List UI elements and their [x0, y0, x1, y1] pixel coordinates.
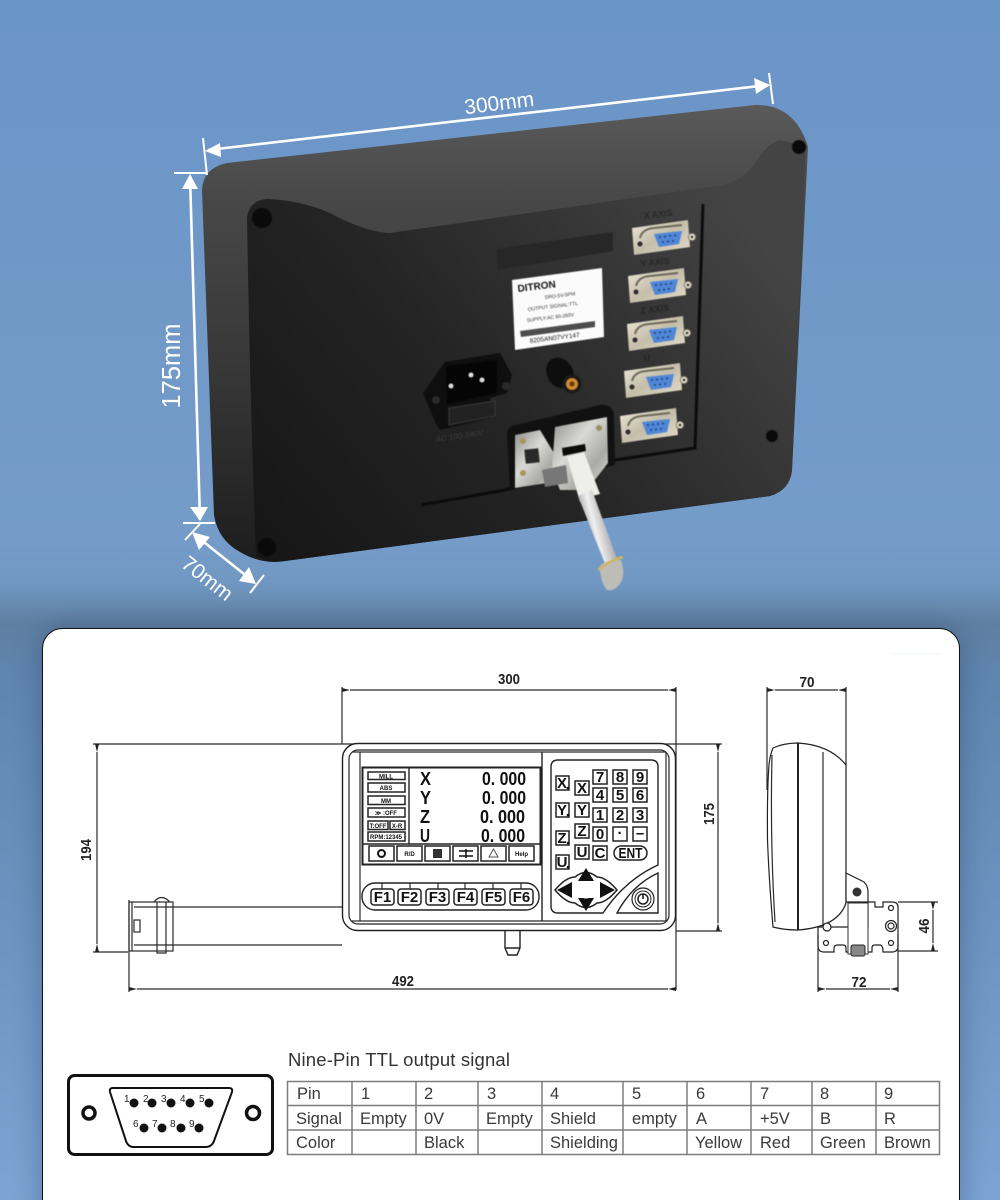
number keys: 1: [596, 807, 604, 824]
signal table: Green: [820, 1134, 866, 1152]
product label: 8205AN07VY147: [529, 332, 580, 345]
axis readouts: 0. 000: [482, 769, 526, 789]
axis keys: Z: [577, 823, 587, 840]
product label: DRO-5V-5PM: [545, 291, 576, 301]
number keys: –: [636, 825, 644, 842]
connector: Z axis: [627, 316, 691, 351]
dimension 46: [916, 910, 933, 943]
status boxes: ABS: [380, 786, 392, 792]
axis keys: U: [577, 844, 587, 861]
signal table: 8: [820, 1085, 829, 1103]
signal table: Empty: [360, 1110, 408, 1128]
number keys: 4: [596, 787, 605, 804]
pin numbers: 6: [133, 1119, 139, 1130]
dimension 175: 175: [701, 803, 718, 825]
number keys: ·: [618, 825, 622, 842]
panel shadow: [42, 628, 960, 1200]
signal table: B: [820, 1110, 831, 1128]
screw holes: [252, 140, 806, 556]
dimension 70: [775, 674, 838, 691]
status boxes: T:OFF: [370, 824, 387, 830]
signal table: 6: [696, 1085, 705, 1103]
axis zero keys: U: [557, 854, 567, 871]
BNC socket: [541, 353, 582, 394]
power socket: AC 100-240V: [434, 428, 484, 444]
axis readouts: 0. 000: [482, 788, 526, 808]
status boxes: RPM:12345: [370, 835, 403, 841]
power key: [617, 873, 658, 913]
probe plug and rod: [515, 417, 623, 590]
status boxes: [368, 772, 405, 841]
dimension 70: 70: [800, 674, 814, 691]
number keys: [593, 769, 647, 862]
axis labels: X AXIS: [643, 208, 673, 221]
signal table: Shielding: [550, 1134, 618, 1152]
product label: SUPPLY:AC 80-260V: [527, 312, 575, 324]
status boxes: MILL: [379, 774, 393, 780]
signal table: 2: [424, 1085, 433, 1103]
connector: probe: [620, 408, 684, 443]
axis labels: [640, 208, 673, 363]
signal table: Yellow: [695, 1134, 742, 1152]
mounting plate: [818, 902, 898, 952]
axis readouts: [420, 769, 526, 846]
axis readouts: Y: [420, 788, 431, 808]
photo: device rear view: [202, 105, 808, 590]
dimension: 70mm: 70mm: [177, 552, 237, 606]
axis readouts: U: [420, 826, 430, 846]
inner rear surface: [247, 140, 806, 561]
axis readouts: Z: [420, 807, 430, 827]
dimension: 300mm: 300mm: [463, 88, 535, 119]
axis readouts: 0. 000: [480, 807, 525, 827]
signal table: Color: [296, 1134, 336, 1152]
status boxes: MM: [381, 799, 391, 805]
signal table: empty: [632, 1110, 678, 1128]
function keys: F4: [457, 889, 475, 906]
signal table: 0V: [424, 1110, 444, 1128]
axis keys: Y: [577, 802, 587, 819]
panel: technical drawing: [42, 628, 960, 1200]
hinge: [846, 873, 868, 902]
heading: nine-pin signal: Nine-Pin TTL output signal: [288, 1049, 510, 1070]
soft keys: [369, 846, 534, 861]
dimension 72: [826, 974, 890, 991]
number keys: 0: [596, 826, 604, 843]
number keys: 8: [616, 769, 624, 786]
axis zero keys: Y: [557, 802, 567, 819]
axis labels: Z AXIS: [640, 303, 670, 316]
product label: OUTPUT SIGNAL:TTL: [528, 301, 579, 313]
axis keys: X: [577, 780, 587, 797]
signal table: A: [696, 1110, 707, 1128]
number keys: 5: [616, 787, 624, 804]
keypad: [551, 760, 658, 913]
number keys: 7: [596, 769, 604, 786]
signal table: Red: [760, 1134, 790, 1152]
signal table: Pin: [297, 1085, 321, 1103]
pins: [130, 1098, 214, 1132]
signal table: Signal: [296, 1110, 342, 1128]
number keys: ENT: [618, 845, 642, 862]
axis readouts: 0. 000: [481, 826, 525, 846]
nine-pin connector diagram: [68, 1076, 272, 1154]
function keys: F3: [429, 889, 446, 906]
dimension: 175mm: [158, 173, 215, 523]
function keys: F6: [513, 889, 530, 906]
mounting screw: [505, 931, 520, 955]
side view: [767, 674, 938, 992]
device body: [202, 105, 808, 562]
signal table: 4: [550, 1085, 559, 1103]
signal table: +5V: [760, 1110, 790, 1128]
power socket: [423, 353, 512, 444]
connector: U axis: [624, 363, 688, 398]
axis zero keys: [556, 775, 569, 871]
dimension: 300mm: [203, 73, 773, 175]
signal table: [287, 1081, 940, 1155]
signal table: Shield: [550, 1110, 596, 1128]
pin numbers: 3: [161, 1094, 167, 1105]
pin numbers: 2: [143, 1094, 149, 1105]
function keys: F2: [401, 889, 418, 906]
device side body: [767, 743, 846, 930]
function keys: F5: [485, 889, 502, 906]
dimension 46: 46: [916, 918, 933, 934]
pin numbers: 4: [180, 1094, 186, 1105]
dimension: 175mm: 175mm: [158, 323, 186, 409]
axis zero keys: Z: [557, 830, 567, 847]
product label: [512, 268, 604, 350]
signal table: 5: [632, 1085, 641, 1103]
axis keys: [575, 780, 589, 861]
pin numbers: 8: [170, 1119, 176, 1130]
number keys: 9: [636, 769, 644, 786]
function keys: [362, 883, 539, 910]
number keys: 3: [636, 807, 644, 824]
axis labels: Y AXIS: [640, 256, 670, 269]
pin numbers: 9: [189, 1119, 195, 1130]
signal table: 1: [361, 1085, 370, 1103]
dimension 492: 492: [392, 973, 414, 990]
signal table: R: [884, 1110, 896, 1128]
pin numbers: [124, 1094, 205, 1130]
signal table: 9: [884, 1085, 893, 1103]
signal table: Black: [424, 1134, 465, 1152]
status boxes: X-R: [392, 824, 403, 830]
connector: X axis: [632, 220, 696, 255]
soft keys: R/D: [404, 852, 415, 858]
pin numbers: 1: [124, 1094, 130, 1105]
mounting bracket front view: [129, 898, 342, 953]
signal table: Brown: [884, 1134, 931, 1152]
soft keys: Help: [515, 852, 528, 858]
dimension 72: 72: [852, 974, 866, 991]
dimension 300: 300: [498, 671, 520, 688]
signal table: Empty: [486, 1110, 534, 1128]
number keys: 6: [636, 787, 644, 804]
plug recess: [507, 405, 615, 490]
dimension lines front view: [78, 671, 722, 992]
connector: Y axis: [628, 268, 692, 303]
number keys: 2: [616, 807, 624, 824]
number keys: C: [595, 845, 606, 862]
dimension: 70mm: [177, 524, 264, 606]
pin numbers: 5: [199, 1094, 205, 1105]
axis labels: U: [643, 352, 651, 363]
dark blank nameplate: [497, 232, 613, 270]
status boxes: ≫ :OFF: [375, 811, 397, 817]
function keys: F1: [374, 889, 391, 906]
rear connector recess: [421, 204, 703, 505]
signal table: 3: [487, 1085, 496, 1103]
arrow keys: [555, 868, 617, 911]
LCD screen: [362, 768, 540, 864]
product label: DITRON: [517, 279, 556, 295]
device front outline: [342, 744, 676, 955]
axis readouts: X: [420, 769, 431, 789]
pin numbers: 7: [152, 1119, 158, 1130]
axis zero keys: X: [557, 775, 567, 792]
dimension 194: 194: [78, 838, 95, 861]
signal table: 7: [760, 1085, 769, 1103]
